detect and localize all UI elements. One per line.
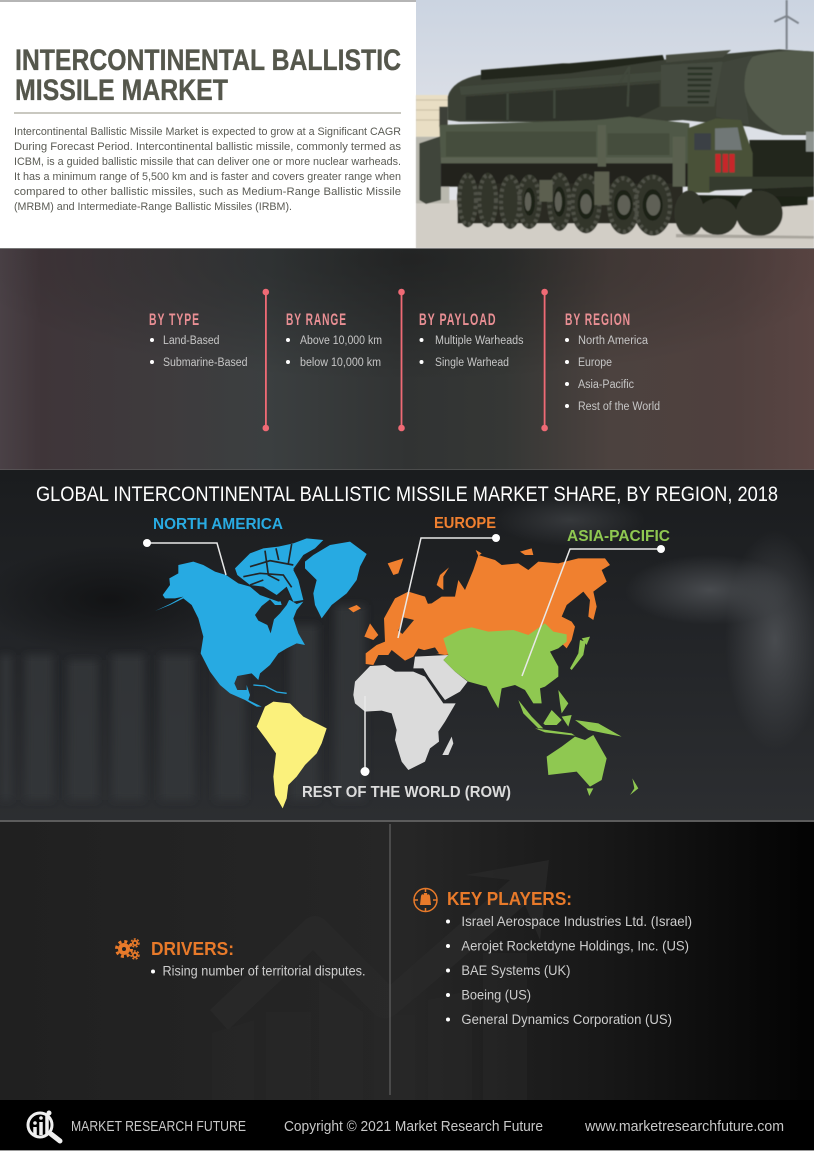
chassis [439, 117, 689, 165]
panel: footer [0, 1100, 814, 1151]
title [15, 44, 401, 107]
leader: north america [143, 539, 226, 575]
segment: by range: BY RANGE [286, 311, 347, 329]
region: north america [155, 538, 367, 707]
canister [448, 49, 814, 135]
segment: by type [149, 311, 248, 369]
key players: Israel Aerospace Industries Ltd. (Israel) [461, 913, 692, 929]
footer brand: MARKET RESEARCH FUTURE [71, 1119, 246, 1135]
key players: KEY PLAYERS: [447, 889, 572, 909]
key players: Boeing (US) [461, 986, 531, 1002]
segment: by region: Asia-Pacific [578, 379, 634, 391]
region: south america [257, 702, 327, 808]
segment: by range [286, 311, 382, 369]
panel: drivers and key players [0, 820, 814, 1100]
segment: by region: North America [578, 335, 649, 347]
divider dot line 2 [398, 289, 405, 431]
drivers [116, 939, 366, 978]
copyright: Copyright © 2021 Market Research Future [284, 1119, 543, 1135]
segment: by region: Rest of the World [578, 401, 660, 413]
icon: key players [414, 888, 437, 912]
panel: header [0, 0, 814, 248]
intro paragraph: compared to other ballistic missiles, such as Medium-Range Ballistic Missile [14, 186, 401, 198]
key players: General Dynamics Corporation (US) [461, 1011, 672, 1027]
segment: by payload: BY PAYLOAD [419, 311, 496, 329]
segment: by type: BY TYPE [149, 311, 200, 329]
intro paragraph: It has a minimum range of 5,500 km and is faster and covers greater range when [14, 171, 401, 183]
label: asia-pacific: ASIA-PACIFIC [567, 528, 670, 545]
label: rest of the world: REST OF THE WORLD (ROW) [302, 784, 511, 801]
world map [143, 534, 665, 808]
key players: Aerojet Rocketdyne Holdings, Inc. (US) [461, 938, 689, 954]
region: asia-pacific [443, 623, 638, 796]
region: rest of the world [353, 655, 468, 770]
label: europe: EUROPE [434, 515, 496, 532]
intro paragraph: ICBM, is a guided ballistic missile that can deliver one or more nuclear warheads. [14, 156, 401, 168]
panel: market segments [0, 248, 814, 470]
drivers: DRIVERS: [151, 939, 234, 959]
icon: logo [28, 1110, 60, 1141]
divider dot line 3 [541, 289, 548, 431]
key players: BAE Systems (UK) [461, 962, 570, 978]
segment: by type: Land-Based [163, 335, 220, 347]
segment: by range: below 10,000 km [300, 357, 381, 369]
intro paragraph: (MRBM) and Intermediate-Range Ballistic Missiles (IRBM). [14, 201, 292, 213]
segment: by payload: Multiple Warheads [435, 335, 524, 347]
region: europe and russia [348, 548, 610, 665]
title: INTERCONTINENTAL BALLISTIC [15, 44, 401, 77]
label: north america: NORTH AMERICA [153, 516, 283, 533]
photo: missile launcher truck [416, 0, 814, 248]
panel: regional market share map [0, 470, 814, 820]
intro paragraph: During Forecast Period. Intercontinental ballistic missile, commonly termed as [14, 141, 401, 153]
segment: by region [565, 311, 660, 413]
segment: by region: Europe [578, 357, 612, 369]
icon: gears [116, 939, 139, 959]
leader: rest of the world [360, 696, 370, 776]
intro paragraph: Intercontinental Ballistic Missile Market is expected to grow at a Significant CAGR [14, 126, 401, 138]
intro paragraph [14, 126, 401, 213]
key players [414, 888, 692, 1027]
right side and cab [749, 140, 814, 203]
website: www.marketresearchfuture.com [584, 1119, 784, 1135]
divider dot line 1 [262, 289, 269, 431]
segment: by payload: Single Warhead [435, 357, 509, 369]
segment: by type: Submarine-Based [163, 357, 248, 369]
drivers: Rising number of territorial disputes. [162, 962, 366, 978]
title: MISSILE MARKET [15, 74, 228, 107]
leader: asia-pacific [522, 545, 665, 676]
leader: europe [398, 534, 500, 638]
wheels [457, 172, 783, 236]
segment: by region: BY REGION [565, 311, 631, 329]
segment: by range: Above 10,000 km [300, 335, 382, 347]
segment: by payload [419, 311, 524, 369]
